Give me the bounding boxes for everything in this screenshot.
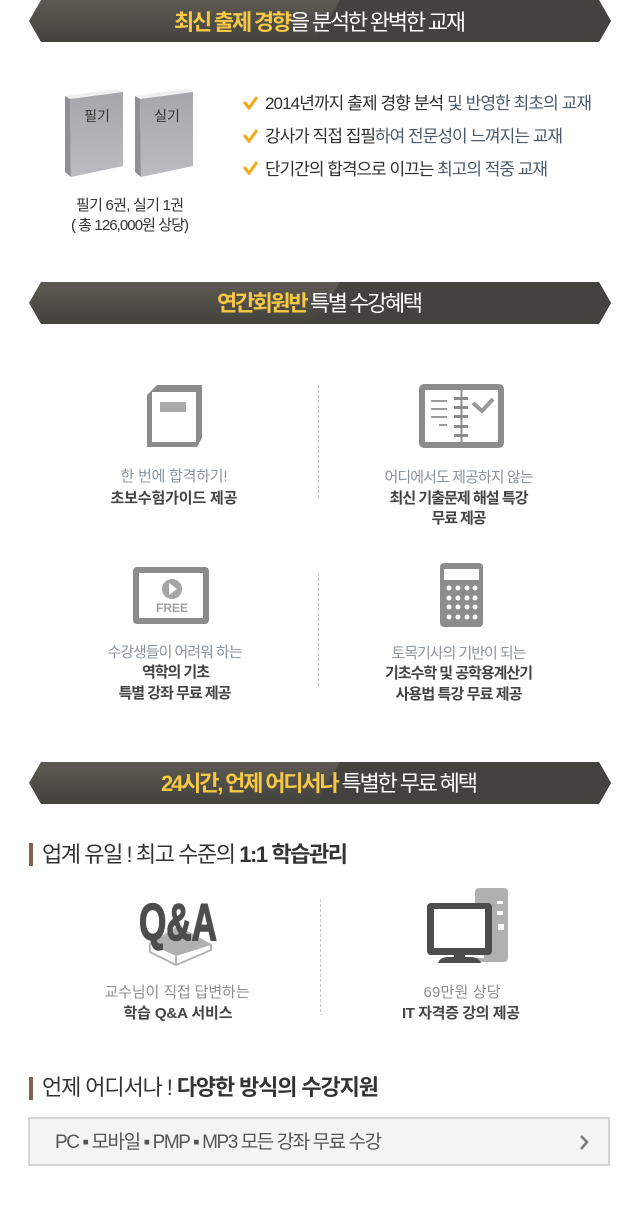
text: calculator lecture: 기초수학 및 공학용계산기 [385,665,533,682]
icon: chevron [581,1136,587,1149]
icon: practical exam book: 실기 [154,108,180,124]
checklist: textbook features [244,94,592,179]
heading: 1:1 study management: 업계 유일 ! 최고 수준의 1:1 학습관리 [42,842,348,867]
text: Q&A service: 교수님이 직접 답변하는 [104,984,250,1001]
text: beginner guide [110,468,238,507]
icon: check 2 [244,130,257,141]
text: calculator lecture: 토목기사의 기반이 되는 [392,645,527,662]
text: IT certificate lectures: IT 자격증 강의 제공 [402,1005,520,1022]
banner: latest exam trends: 최신 출제 경향을 분석한 완벽한 교재 [174,10,466,35]
button: free lectures on all devices [29,1118,609,1165]
text: beginner guide: 한 번에 합격하기! [120,468,228,485]
feature 3: 단기간의 합격으로 이끄는 최고의 적중 교재 [265,160,548,179]
icon: Q&A box: Q&A [139,894,217,952]
text: IT certificate lectures [402,984,520,1022]
button: free lectures on all devices: PC ▪ 모바일 ▪ PMP ▪ MP3 모든 강좌 무료 수강 [55,1131,382,1153]
book value caption: ( 총 126,000원 상당) [71,217,189,234]
feature 2: 강사가 직접 집필하여 전문성이 느껴지는 교재 [265,127,563,146]
text: calculator lecture [385,645,533,703]
icon: free video screen: FREE [156,601,188,615]
icon: desktop computer [427,888,508,963]
icon: written exam book [65,89,123,177]
banner: annual member benefits [29,282,611,324]
text: past exam lecture: 어디에서도 제공하지 않는 [384,469,534,486]
icon: written exam book: 필기 [84,108,110,124]
icon: check 3 [244,162,257,173]
icon: open planner [419,384,504,448]
icon: free video screen [133,567,209,624]
text: mechanics basics: 수강생들이 어려워 하는 [108,644,243,661]
text: calculator lecture: 사용법 특강 무료 제공 [396,686,523,703]
text: past exam lecture: 최신 기출문제 해설 특강 [390,490,529,507]
feature 1: 2014년까지 출제 경향 분석 및 반영한 최초의 교재 [265,94,592,113]
text: Q&A service [104,984,250,1022]
banner: 24 hour free benefits: 24시간, 언제 어디서나 특별한 무료 혜택 [161,771,478,796]
icon: guide book [147,385,202,447]
text: past exam lecture: 무료 제공 [432,510,487,527]
panel: textbooks [65,89,193,234]
icon: Q&A box [139,894,217,965]
text: Q&A service: 학습 Q&A 서비스 [124,1005,233,1022]
text: IT certificate lectures: 69만원 상당 [424,984,501,1001]
heading: various learning support: 언제 어디서나 ! 다양한 방식의 수강지원 [42,1075,379,1100]
text: mechanics basics [108,644,243,702]
icon: calculator [440,563,483,627]
text: past exam lecture [384,469,534,527]
text: mechanics basics: 역학의 기초 [142,664,210,681]
banner: 24 hour free benefits [29,762,611,804]
banner: latest exam trends [29,0,611,42]
book count caption: 필기 6권, 실기 1권 [76,197,184,214]
icon: check 1 [244,97,257,108]
text: mechanics basics: 특별 강좌 무료 제공 [118,685,232,702]
text: beginner guide: 초보수험가이드 제공 [110,490,238,507]
icon: practical exam book [135,89,193,177]
banner: annual member benefits: 연간회원반 특별 수강혜택 [217,291,423,316]
